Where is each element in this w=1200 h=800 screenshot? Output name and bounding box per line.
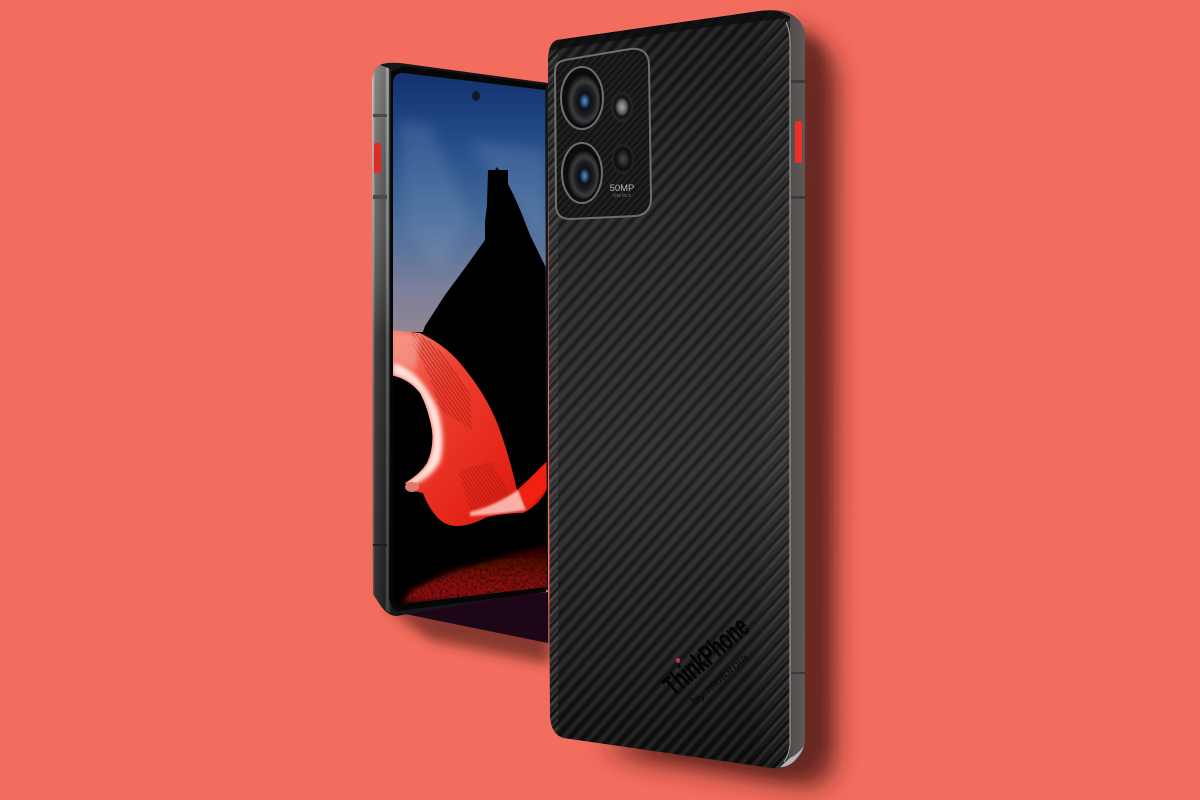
silver bottom corner <box>780 746 804 767</box>
right side rail <box>772 11 805 768</box>
ThinkPhone logo: by motorola <box>689 651 752 708</box>
ribbon inner highlight <box>393 362 443 486</box>
shadow of back phone <box>600 22 838 788</box>
milky way glow <box>400 121 545 256</box>
main camera lens <box>561 67 603 129</box>
ThinkPhone logo <box>656 609 766 714</box>
front phone screen <box>390 70 550 612</box>
dark wedge below front phone <box>405 592 548 643</box>
infographic: ThinkPhone product image <box>372 10 856 800</box>
front phone frame <box>372 63 548 616</box>
back phone frame <box>548 10 805 768</box>
secondary camera lens <box>562 143 602 203</box>
black lower wallpaper <box>390 332 550 612</box>
shadow of front phone <box>385 600 550 664</box>
red side button <box>795 121 802 163</box>
ribbon line texture <box>412 332 472 430</box>
camera island <box>555 48 651 220</box>
front phone side rail <box>372 65 393 614</box>
red ribbon light trail <box>390 330 548 526</box>
ThinkPhone logo: ThinkPhone <box>658 611 756 702</box>
mountain silhouette <box>420 167 548 340</box>
front phone red button <box>374 143 381 173</box>
selfie camera <box>472 91 480 101</box>
sky wallpaper <box>390 70 550 340</box>
carbon fibre back panel <box>540 0 795 780</box>
red ground <box>400 544 550 606</box>
50MP label: OIS f/1.8 <box>613 193 631 198</box>
rail highlight line <box>784 22 790 762</box>
flash lens <box>611 92 633 122</box>
small sensor lens <box>612 144 634 174</box>
back phone <box>540 0 805 780</box>
50MP label: 50MP <box>610 183 634 194</box>
front phone <box>372 63 550 643</box>
